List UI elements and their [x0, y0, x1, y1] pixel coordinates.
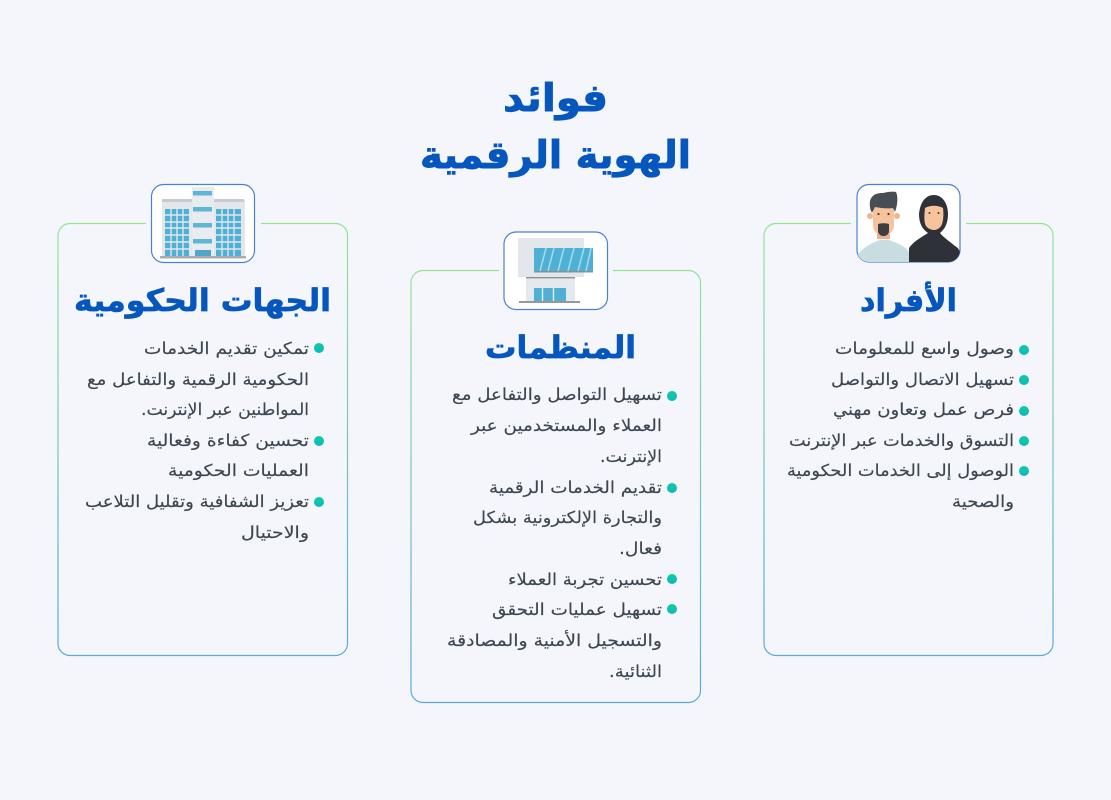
woman [909, 195, 960, 262]
title: الهوية الرقمية [420, 133, 691, 177]
list: organization benefits [447, 385, 677, 681]
icon: organization building [504, 232, 608, 310]
list: government benefits: تحسين كفاءة وفعالية [147, 431, 309, 451]
list: government benefits [85, 339, 324, 543]
list: organization benefits: تقديم الخدمات الرقمية [489, 478, 662, 498]
list: government benefits: تعزيز الشفافية وتقليل التلاعب [85, 492, 309, 512]
panel: organizations [411, 232, 700, 702]
list: government benefits: العمليات الحكومية [168, 461, 309, 481]
list: organization benefits: والتسجيل الأمنية والمصادقة [447, 630, 662, 651]
heading: government entities: الجهات الحكومية [74, 283, 331, 319]
list: organization benefits: العملاء والمستخدمين عبر [470, 416, 662, 436]
list: organization benefits: تحسين تجربة العملاء [508, 570, 662, 590]
list: organization benefits: تسهيل عمليات التحقق [492, 600, 662, 620]
list: individual benefits: تسهيل الاتصال والتواصل [831, 370, 1014, 390]
panel: individuals [764, 184, 1053, 656]
list: government benefits: المواطنين عبر الإنترنت. [141, 400, 309, 420]
list: organization benefits: الثنائية. [609, 662, 662, 681]
title [420, 76, 691, 177]
title: فوائد [503, 76, 608, 120]
icon: government building [152, 184, 254, 262]
list: government benefits: الحكومية الرقمية والتفاعل مع [87, 370, 309, 390]
panel: government entities [58, 184, 348, 656]
list: government benefits: والاحتيال [241, 523, 309, 543]
list: organization benefits: تسهيل التواصل والتفاعل مع [452, 385, 662, 405]
man [857, 240, 909, 262]
list: individual benefits: فرص عمل وتعاون مهني [833, 400, 1014, 420]
list: government benefits: تمكين تقديم الخدمات [144, 339, 309, 358]
heading: individuals: الأفراد [860, 281, 957, 319]
list: individual benefits: والصحية [952, 492, 1014, 512]
list: individual benefits: الوصول إلى الخدمات الحكومية [787, 461, 1014, 481]
icon: man and woman [857, 184, 960, 262]
list: organization benefits: الإنترنت. [600, 447, 662, 467]
list: individual benefits: التسوق والخدمات عبر الإنترنت [789, 431, 1014, 451]
list: organization benefits: فعال. [619, 539, 662, 558]
infographic canvas [57, 82, 1054, 704]
list: individual benefits [787, 339, 1029, 512]
heading: organizations: المنظمات [485, 330, 636, 366]
list: organization benefits: والتجارة الإلكترونية بشكل [473, 508, 662, 528]
list: individual benefits: وصول واسع للمعلومات [835, 339, 1014, 359]
